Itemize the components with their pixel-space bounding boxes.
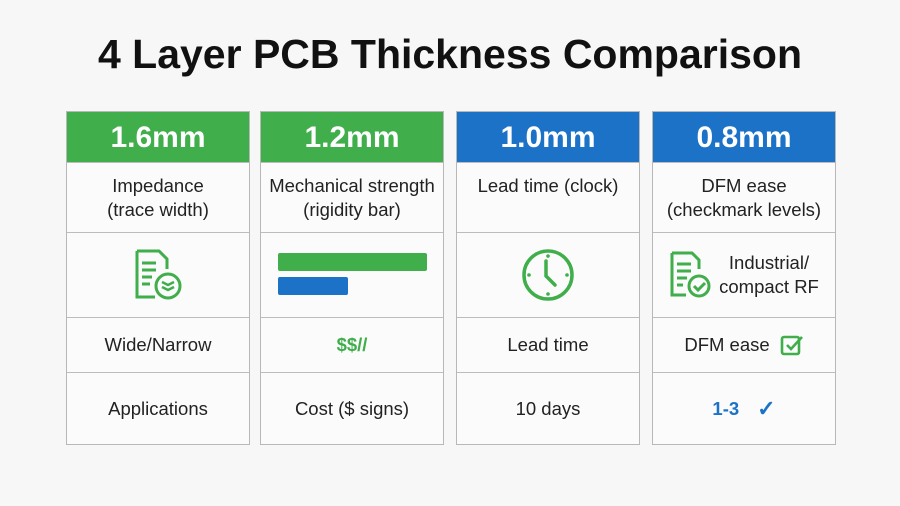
label impedance: Impedance	[112, 175, 204, 196]
label mechanical strength	[261, 162, 443, 232]
label mechanical strength: (rigidity bar)	[303, 199, 401, 220]
icon: clock	[457, 232, 639, 317]
text 10 days	[457, 372, 639, 445]
text applications	[67, 372, 249, 445]
text 10 days: 10 days	[516, 398, 580, 419]
panel: 0.8mm	[652, 111, 836, 445]
header 1.0mm: 1.0mm	[500, 121, 596, 154]
label dfm ease	[653, 162, 835, 232]
header 0.8mm: 0.8mm	[696, 121, 792, 154]
text dfm ease with check	[653, 317, 835, 372]
label impedance: (trace width)	[107, 199, 209, 220]
icon and text industrial: compact RF	[719, 276, 819, 297]
header 1.0mm	[457, 112, 639, 162]
panel: 1.6mm	[66, 111, 250, 445]
text lead time: Lead time	[507, 334, 589, 355]
header 1.2mm	[261, 112, 443, 162]
label impedance	[67, 162, 249, 232]
label mechanical strength: Mechanical strength	[269, 175, 435, 196]
text wide/narrow: Wide/Narrow	[105, 334, 211, 355]
text cost symbol: $$//	[337, 334, 367, 355]
icon and text industrial	[653, 232, 835, 317]
chart: rigidity bars	[261, 232, 443, 317]
text 1-3 check: 1-3	[712, 398, 739, 419]
label lead time	[457, 162, 639, 232]
panel: 1.0mm	[456, 111, 640, 445]
header 0.8mm	[653, 112, 835, 162]
text cost symbol	[261, 317, 443, 372]
title: 4 Layer PCB Thickness Comparison	[98, 31, 802, 77]
header 1.6mm: 1.6mm	[110, 121, 206, 154]
icon and text industrial: Industrial/	[729, 252, 809, 273]
text 1-3 check	[653, 372, 835, 445]
text lead time	[457, 317, 639, 372]
label dfm ease: (checkmark levels)	[667, 199, 821, 220]
label dfm ease: DFM ease	[701, 175, 787, 196]
header 1.2mm: 1.2mm	[304, 121, 400, 154]
text 1-3 check: ✓	[757, 396, 776, 421]
panel: 1.2mm	[260, 111, 444, 445]
header 1.6mm	[67, 112, 249, 162]
text wide/narrow	[67, 317, 249, 372]
icon: document layers	[67, 232, 249, 317]
text applications: Applications	[108, 398, 208, 419]
text cost	[261, 372, 443, 445]
label lead time: Lead time (clock)	[478, 175, 618, 196]
text cost: Cost ($ signs)	[295, 398, 409, 419]
text dfm ease with check: DFM ease	[684, 334, 770, 355]
